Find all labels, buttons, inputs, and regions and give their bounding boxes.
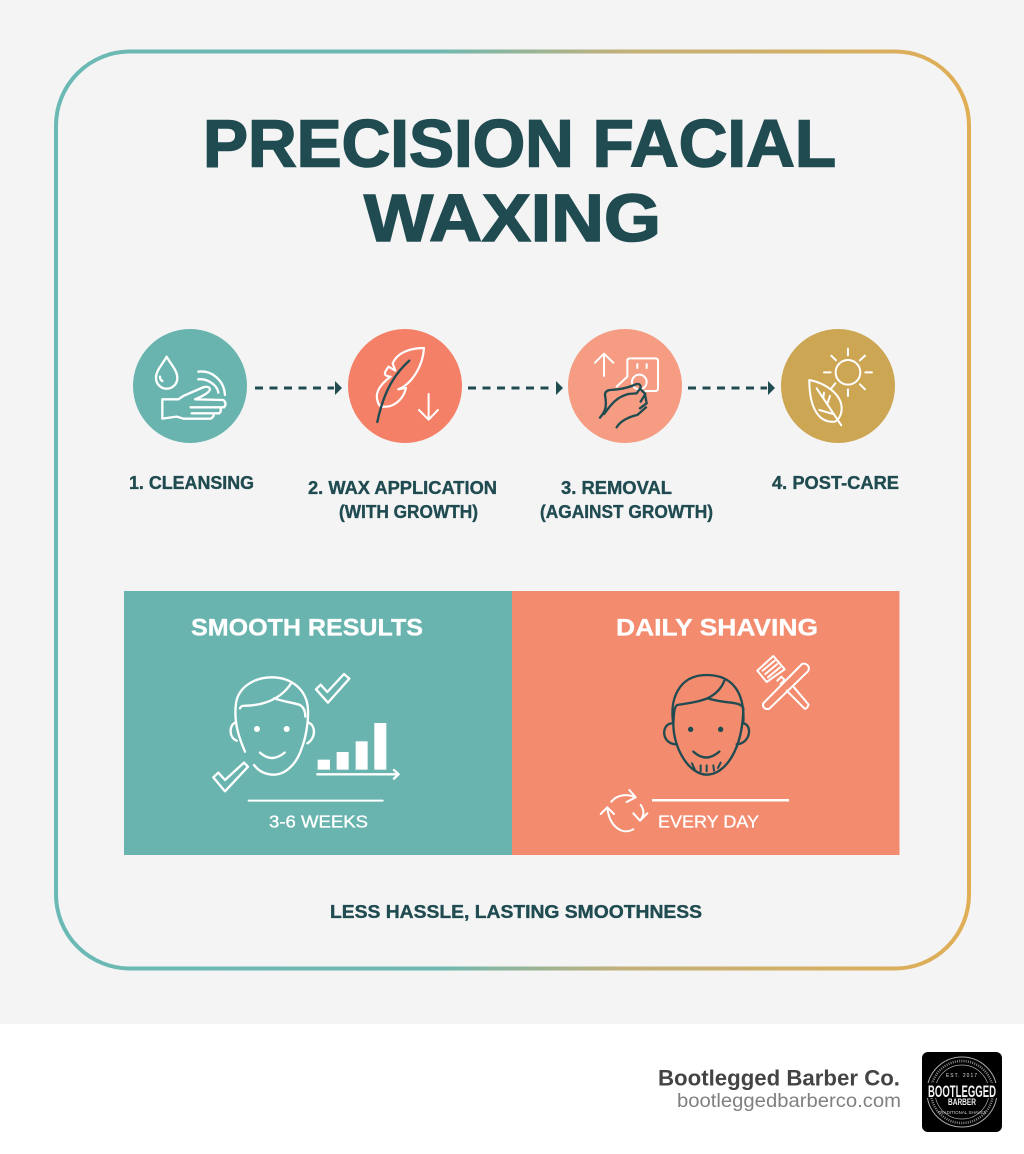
duration: 3-6 WEEKS xyxy=(269,812,368,832)
brand name: Bootlegged Barber Co. xyxy=(658,1066,900,1090)
logo: BARBER xyxy=(948,1097,976,1107)
label: 2. WAX APPLICATION xyxy=(308,478,497,498)
label: (AGAINST GROWTH) xyxy=(540,502,713,522)
icon: water drop and hand xyxy=(133,329,247,443)
title: PRECISION FACIAL xyxy=(203,106,836,182)
label: 4. POST-CARE xyxy=(772,473,899,493)
icon: sun and leaf xyxy=(781,329,895,443)
panel: daily shaving xyxy=(512,591,900,855)
title xyxy=(203,106,836,256)
heading: SMOOTH RESULTS xyxy=(191,614,423,642)
icon: crossed razor xyxy=(757,656,809,709)
step 4: post-care xyxy=(772,329,899,493)
tagline: LESS HASSLE, LASTING SMOOTHNESS xyxy=(330,902,702,922)
heading: DAILY SHAVING xyxy=(616,614,818,642)
step 2: wax application xyxy=(308,329,497,522)
label: 3. REMOVAL xyxy=(561,478,672,498)
step 3: removal xyxy=(540,329,713,522)
label xyxy=(540,478,713,522)
icon: feather and down arrow xyxy=(348,329,462,443)
rounded gradient frame xyxy=(56,52,969,968)
divider line xyxy=(652,799,789,802)
logo xyxy=(922,1052,1002,1132)
icon: repeat cycle arrows xyxy=(601,790,647,831)
icon: smooth face, checks and bar chart xyxy=(213,674,399,801)
logo: EST. 2017 xyxy=(946,1073,978,1079)
arrow 2 to 3 xyxy=(468,381,563,395)
panel: smooth results xyxy=(124,591,512,855)
icon: stubbled face xyxy=(664,675,749,775)
arrow 1 to 2 xyxy=(255,381,342,395)
label: 1. CLEANSING xyxy=(129,473,254,493)
logo: TRADITIONAL SHAVES xyxy=(938,1110,986,1115)
label xyxy=(308,478,497,522)
step 1: cleansing xyxy=(129,329,254,493)
arrow 3 to 4 xyxy=(688,381,775,395)
title: WAXING xyxy=(364,181,661,256)
label: (WITH GROWTH) xyxy=(339,502,478,522)
icon: hand pulling strip and up arrow xyxy=(568,329,682,443)
brand url: bootleggedbarberco.com xyxy=(677,1090,901,1112)
frequency: EVERY DAY xyxy=(658,812,759,832)
